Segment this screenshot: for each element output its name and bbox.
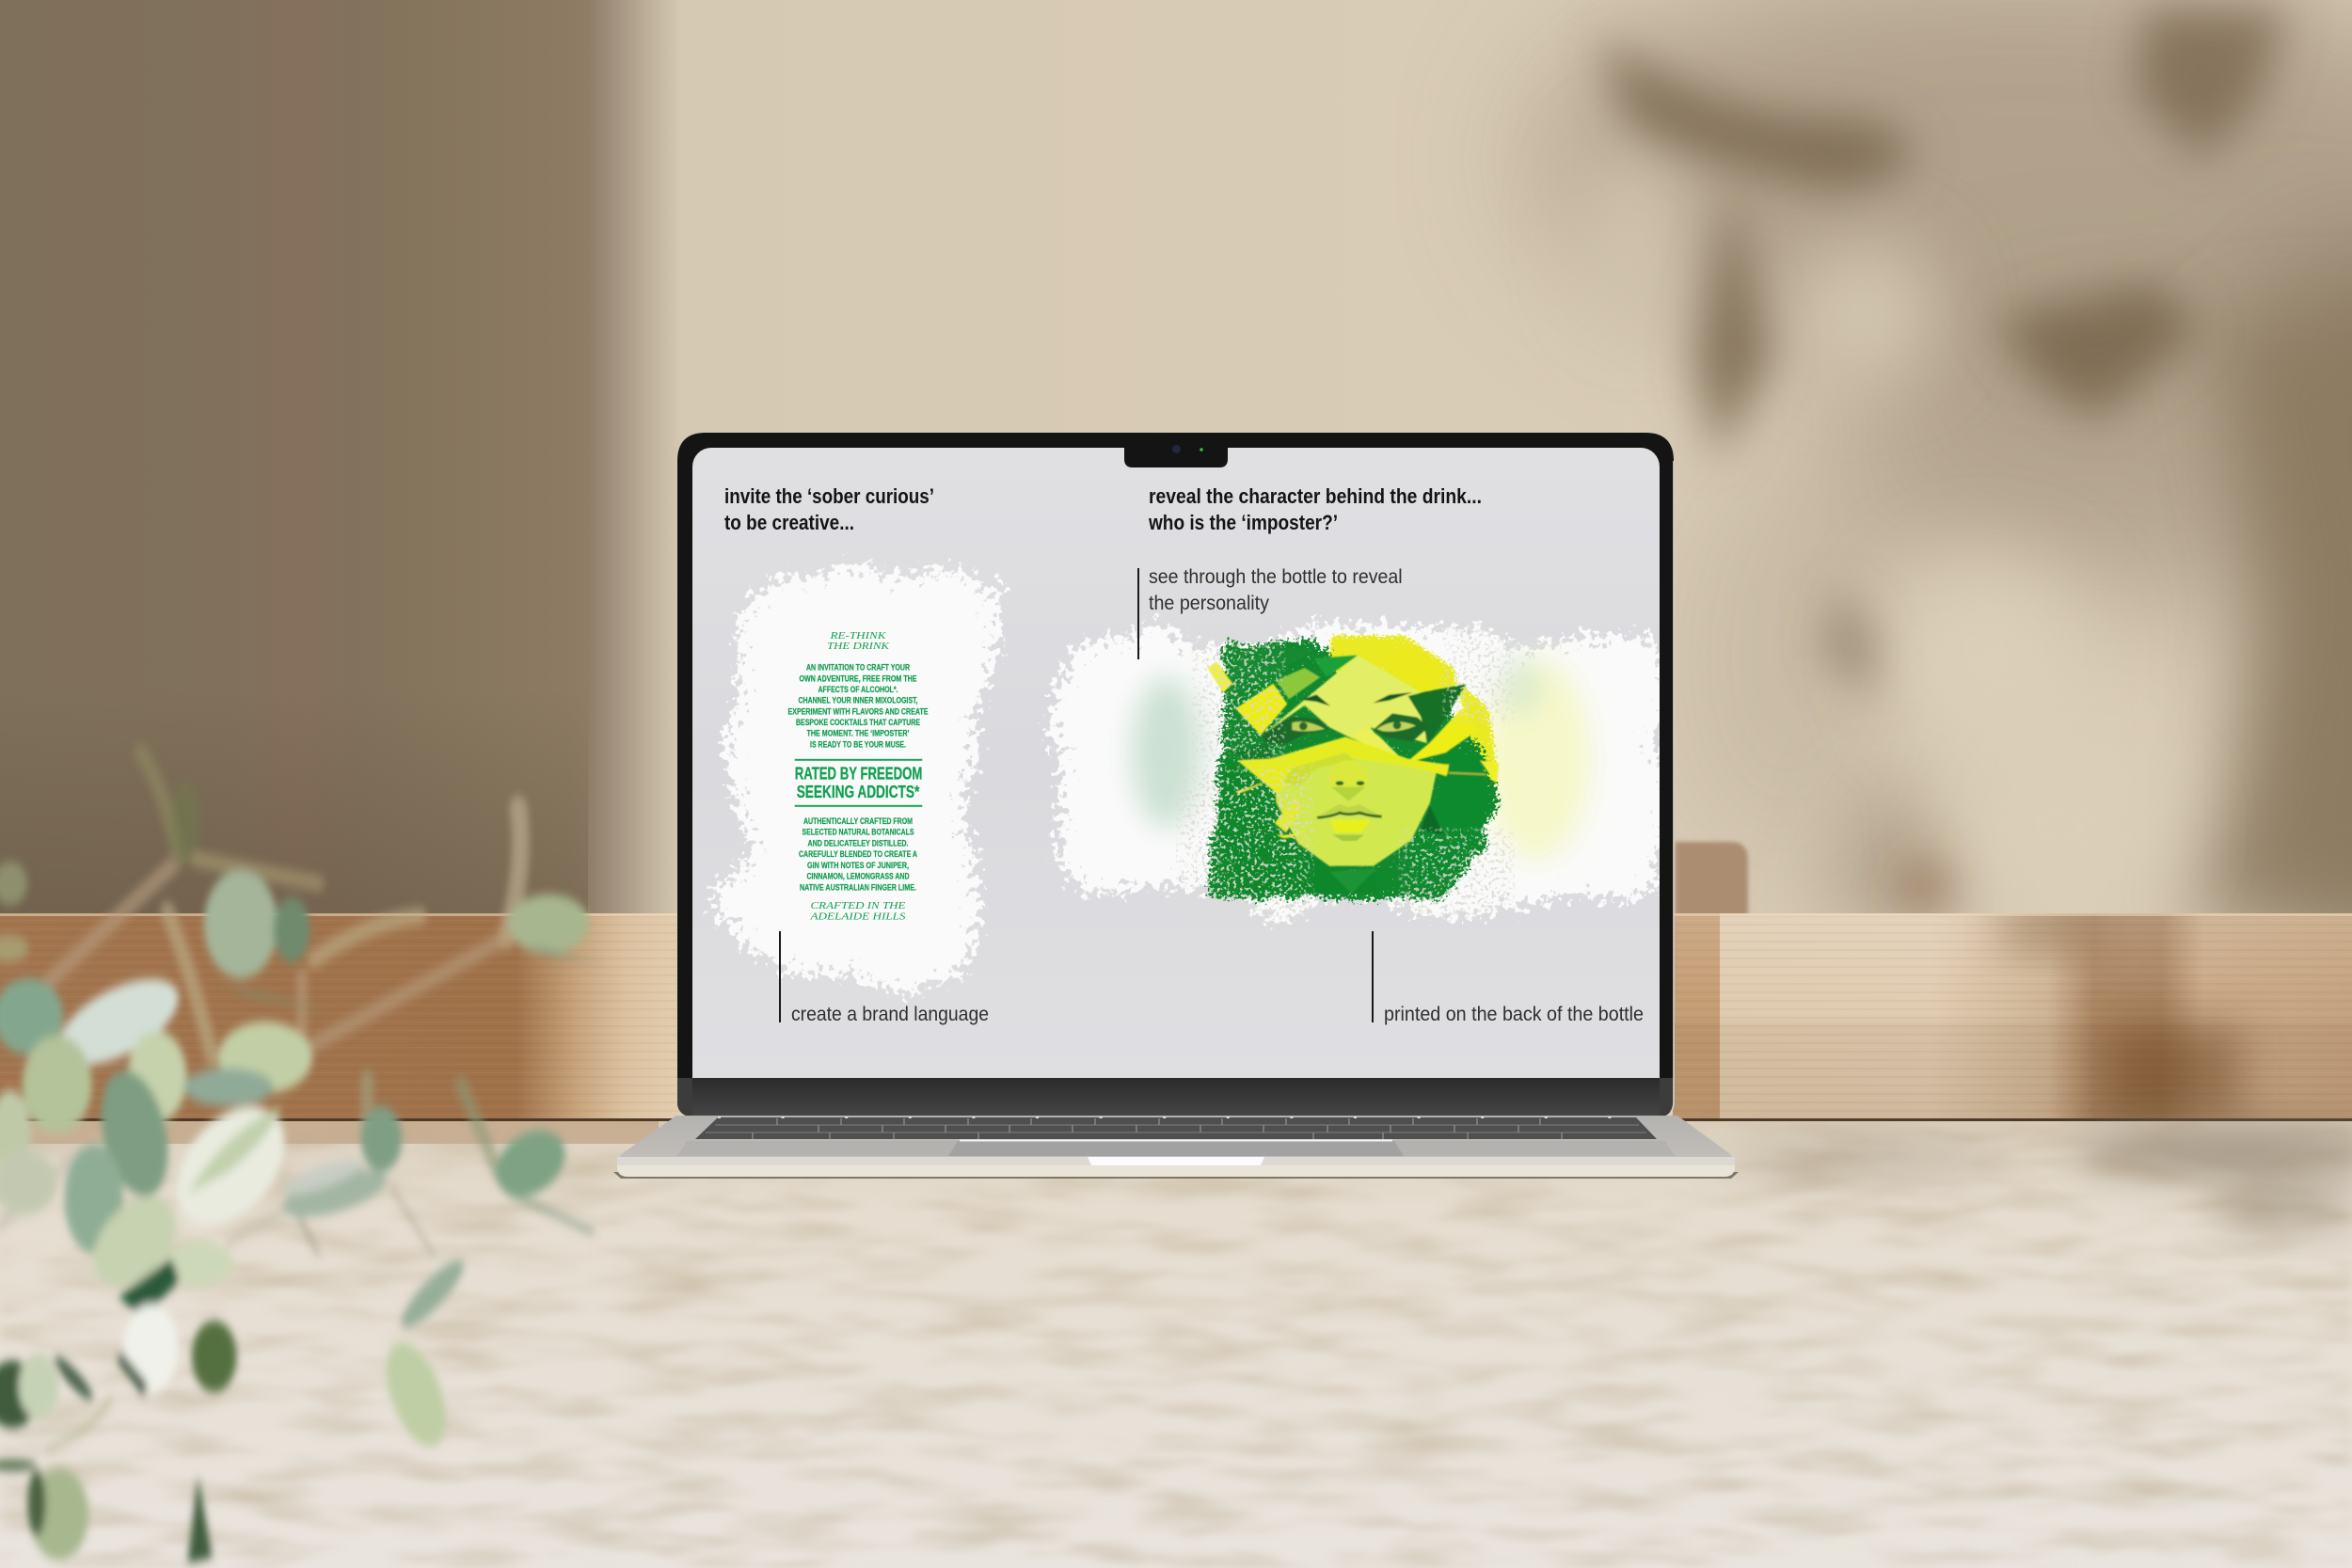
lower shards [1275,798,1302,832]
bottle back text: THE DRINK [827,641,890,652]
nose [1329,760,1368,795]
lit patches on wall [1590,132,2173,903]
trackpad [948,1140,1404,1156]
pale wash [1132,658,1590,859]
bottle back text: ADELAIDE HILLS [809,911,906,922]
bottle back text: GIN WITH NOTES OF JUNIPER, [807,861,909,871]
brush panel: label copy [724,558,1005,984]
bottle back text: THE MOMENT. THE ‘IMPOSTER’ [807,729,910,739]
camera notch [1124,445,1228,467]
white specks [1176,765,1314,928]
bottle back text: SELECTED NATURAL BOTANICALS [802,828,914,838]
plant foreground [0,752,604,1563]
heading: left [724,484,934,534]
heading: right: reveal the character behind the drink... [1149,484,1482,508]
bottle back text: CAREFULLY BLENDED TO CREATE A [799,849,917,860]
leaves [0,780,604,1563]
bottle back text: RE-THINK [829,630,886,641]
bottle back text: OWN ADVENTURE, FREE FROM THE [800,673,917,684]
bottle back text: AFFECTS OF ALCOHOL*. [818,685,898,695]
heading: right: who is the ‘imposter?’ [1148,511,1338,534]
hair shapes [1230,649,1314,696]
baseboard left [0,913,679,1120]
bottle back text: BESPOKE COCKTAILS THAT CAPTURE [796,718,920,728]
small box behind laptop [1675,842,1748,917]
bottle back text: CHANNEL YOUR INNER MIXOLOGIST, [798,696,918,706]
callout: brand language: create a brand language [791,1003,989,1025]
leaf shadows on wall [1534,0,2352,959]
screen [692,448,1670,1078]
callout: see through [1137,565,1403,659]
forehead [1263,656,1427,752]
bottle back text: AND DELICATELEY DISTILLED. [807,838,909,848]
band across face [1237,736,1449,793]
callout: printed on bottle: printed on the back of the bottle [1384,1003,1644,1025]
heading: right [1148,484,1482,534]
bottle back text [788,630,929,922]
white paint swatch right [1052,628,1670,909]
laptop base [613,1116,1739,1179]
bottle back text: CRAFTED IN THE [811,900,906,911]
callout: see through: the personality [1149,592,1269,614]
dark hair right [1408,684,1466,744]
dark patch left of face [1235,743,1277,768]
callout: see through: see through the bottle to reveal [1149,565,1403,588]
bottle back text: IS READY TO BE YOUR MUSE. [810,739,906,750]
wall with shadow from left [0,0,2352,917]
table surface [0,1121,2352,1568]
bottle back text: RATED BY FREEDOM [795,764,922,784]
bottle back text: CINNAMON, LEMONGRASS AND [807,872,910,882]
eyes [1261,717,1328,744]
face artwork [1207,646,1499,894]
bottle back text: SEEKING ADDICTS* [797,782,920,801]
brush panel: portrait [1052,618,1670,928]
bottle back text: NATIVE AUSTRALIAN FINGER LIME. [800,882,916,893]
heading: left: to be creative... [724,511,854,534]
white paint swatch left [724,558,1005,984]
rough green and yellow paint [1455,677,1499,797]
portrait [1132,618,1590,928]
keyboard [695,1117,1657,1139]
lips [1320,804,1380,816]
bottle back text: AUTHENTICALLY CRAFTED FROM [803,816,913,827]
stems [0,752,592,1449]
baseboard right [1673,913,2352,1120]
face mid [1273,736,1438,866]
bottle back text: AN INVITATION TO CRAFT YOUR [806,663,910,673]
heading: left: invite the ‘sober curious’ [724,484,934,508]
yellow geometric shards [1383,646,1446,691]
thumb notch [1088,1157,1264,1165]
laptop [613,433,1739,1179]
display lid [677,433,1674,1116]
bottle back text: EXPERIMENT WITH FLAVORS AND CREATE [788,706,929,717]
